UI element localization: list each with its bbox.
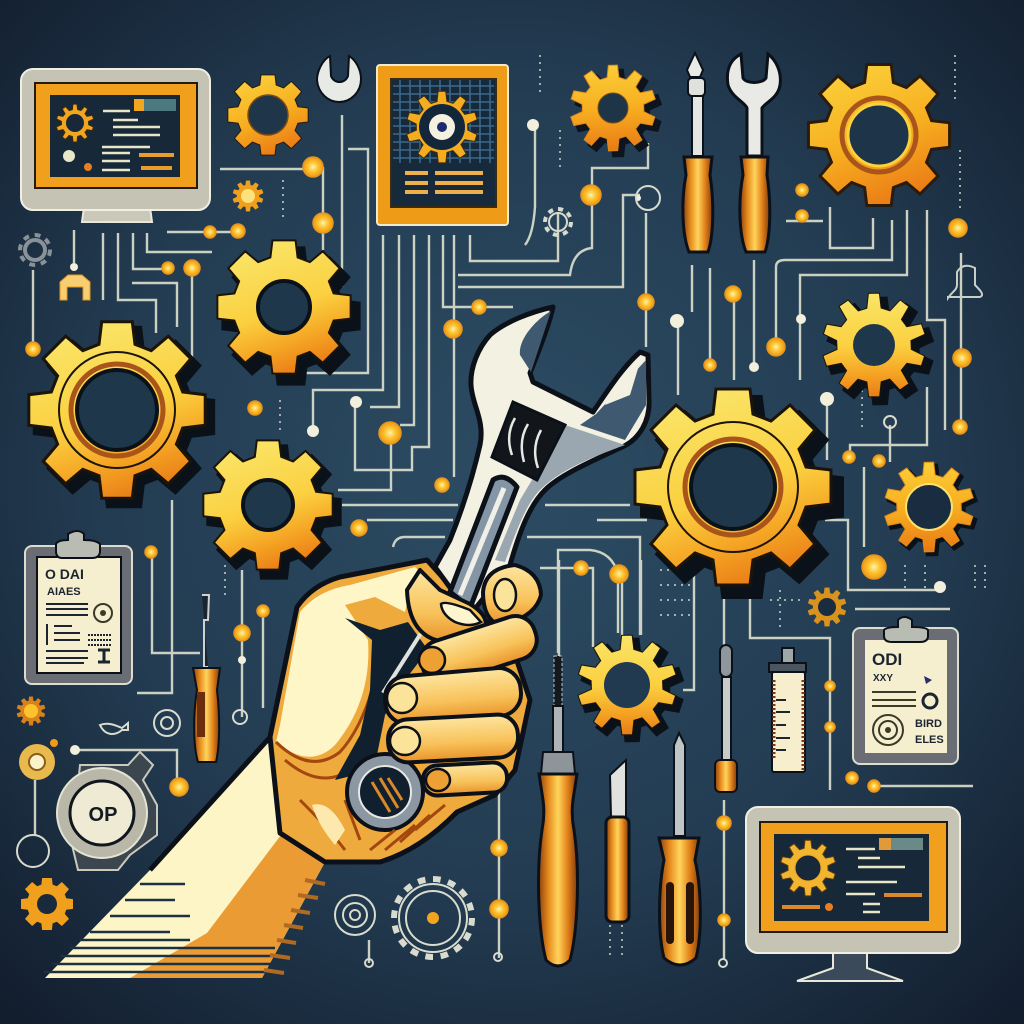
icon: flat screwdriver (659, 733, 700, 965)
OP dial: OP (89, 804, 117, 826)
gear: right middle (809, 281, 945, 415)
gear: large left (29, 322, 212, 505)
finger three (387, 714, 519, 763)
icon: long screwdriver (539, 656, 577, 966)
icon: syringe tube (769, 648, 806, 772)
clipboard left: AIAES (47, 586, 81, 598)
wrench slot (450, 477, 517, 608)
gear: large right (635, 389, 840, 595)
hand and wrench (44, 307, 649, 978)
mesh (393, 80, 494, 163)
dial housing (72, 752, 157, 870)
thumb (407, 570, 486, 642)
finger tip top (483, 565, 541, 625)
dark grip gap (335, 618, 428, 780)
hand base (270, 560, 530, 862)
OP dial (57, 752, 157, 870)
icon: padlock bracket (60, 275, 90, 300)
small screwdriver left (193, 595, 220, 762)
arm (44, 735, 325, 978)
icon: chisel (606, 760, 629, 922)
highlight on heel (312, 804, 345, 845)
wrench (347, 307, 649, 830)
circuit lines (33, 115, 973, 963)
small gears (14, 177, 851, 728)
gear: upper mid left (217, 240, 358, 383)
wrench head (435, 307, 649, 615)
lower hand hatch (370, 805, 445, 850)
clipboard right: ELES (915, 734, 944, 746)
outline gears and rings (17, 186, 896, 967)
gear: small top (228, 75, 308, 155)
monitor gear (773, 833, 843, 903)
clipboard right: ODI (872, 650, 902, 669)
monitor top left (21, 69, 210, 222)
panel gear (397, 82, 487, 172)
icon: outline figure (948, 266, 982, 298)
pale nodes (70, 119, 946, 755)
palm shading (276, 690, 372, 850)
arm stripe cuffs (264, 880, 325, 973)
clipboard right (853, 617, 958, 764)
icon: top screwdriver (683, 53, 713, 252)
clipboard left (25, 531, 132, 684)
wrench grey body (495, 425, 625, 562)
gear: lower mid left (203, 440, 339, 577)
knurl (492, 402, 565, 480)
lower shank (383, 630, 423, 693)
arm shaded side (130, 835, 325, 978)
lower tools (539, 645, 806, 966)
monitor gear (51, 99, 99, 147)
centre dot of outline gear (427, 912, 439, 924)
clipboard left: O DAI (45, 566, 84, 582)
wrench ring (347, 754, 423, 830)
finger four (422, 762, 508, 796)
monitor stand (82, 207, 152, 222)
icon: top wrench (727, 54, 780, 252)
gear: top right (808, 64, 950, 206)
clipboard right: XXY (873, 673, 893, 684)
framed gear panel (377, 65, 508, 225)
gear: far right (873, 451, 988, 566)
clipboard right: BIRD (915, 718, 942, 730)
gear: lower centre (565, 623, 694, 752)
arm stripes (44, 884, 275, 972)
icon: thin screwdriver (715, 645, 737, 792)
circuit nodes (26, 157, 971, 926)
gear: bottom left small (22, 879, 72, 929)
tick clusters (65, 55, 985, 955)
finger two (383, 666, 523, 726)
icon: small wrench top (317, 56, 361, 102)
fingers (383, 565, 542, 796)
monitor stand (797, 950, 903, 981)
monitor bottom right (746, 807, 960, 981)
jaw shading (520, 311, 646, 440)
finger one (416, 611, 542, 689)
palm highlight (276, 567, 440, 757)
tools top right (683, 53, 780, 252)
ring node (19, 739, 58, 780)
gear: top centre (559, 55, 672, 166)
